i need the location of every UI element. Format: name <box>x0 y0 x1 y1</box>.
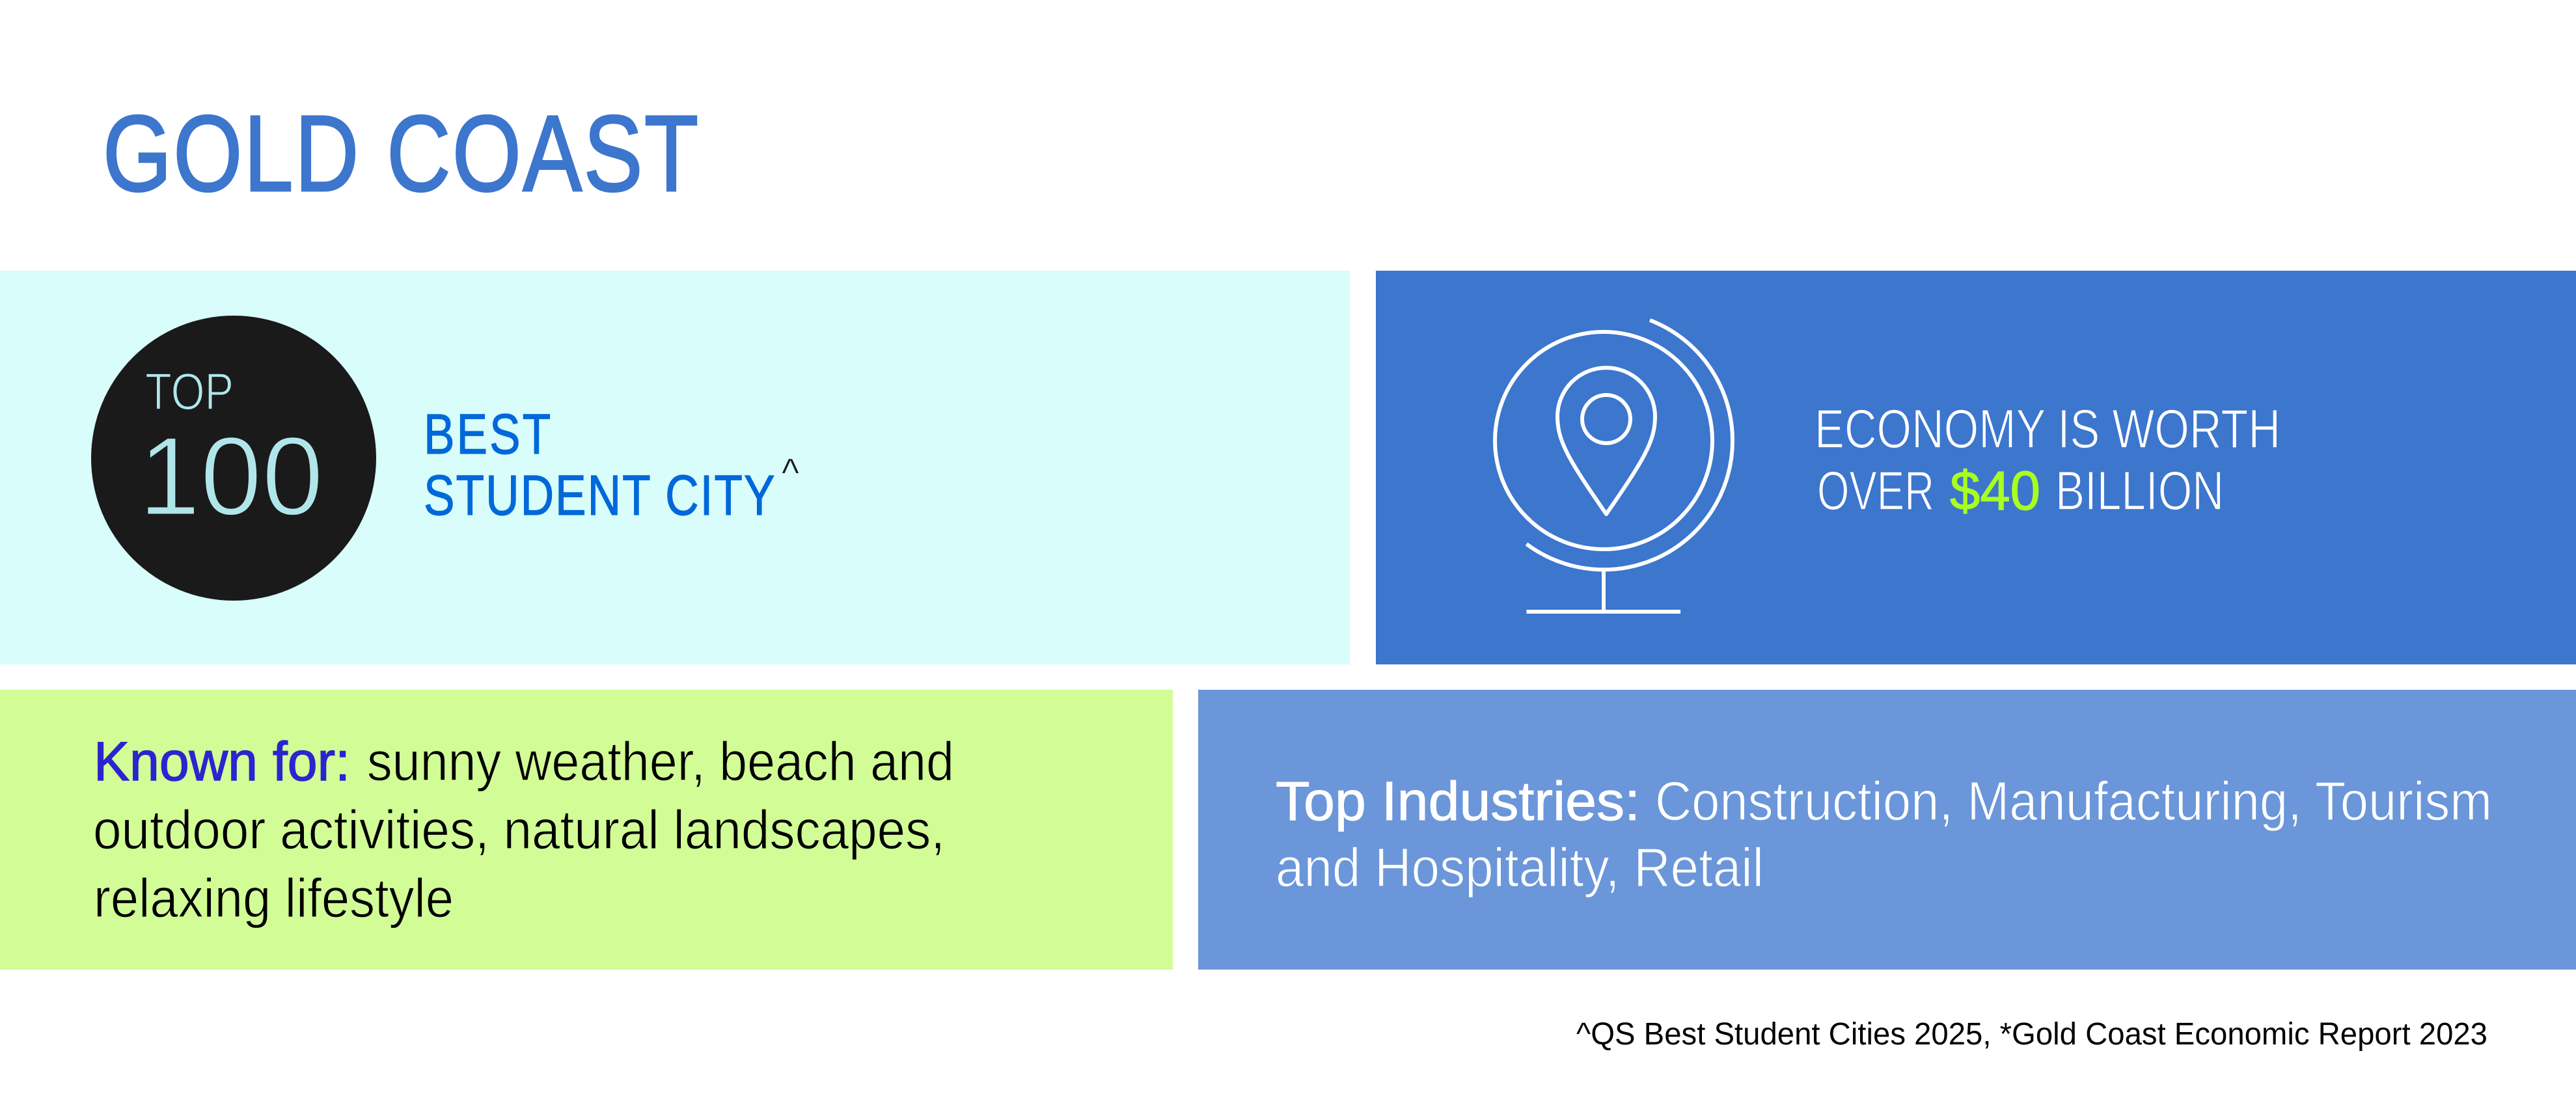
text: known for: outdoor activities, natural landscapes, <box>93 799 945 860</box>
panel: best student city <box>0 271 1350 664</box>
stat: economy value: OVER <box>1817 460 1934 521</box>
text: top industries: Construction, Manufacturing, Tourism <box>1655 770 2492 832</box>
panel: known for <box>0 690 1173 970</box>
footnote: ^QS Best Student Cities 2025, *Gold Coast Economic Report 2023 <box>1576 1017 2487 1052</box>
title: GOLD COAST <box>103 94 698 214</box>
stat: economy value <box>1815 398 2281 521</box>
panel: economy <box>1376 271 2576 664</box>
text: top industries: and Hospitality, Retail <box>1276 837 1764 898</box>
text: top industries: Top Industries: <box>1276 770 1640 832</box>
heading: best student city: BEST <box>424 402 551 466</box>
badge: top 100: 100 <box>139 414 323 539</box>
heading: best student city <box>424 402 799 527</box>
stat: economy value: BILLION <box>2055 460 2224 521</box>
text: top industries <box>1276 770 2492 898</box>
heading: best student city: STUDENT CITY <box>424 463 775 527</box>
text: known for: sunny weather, beach and <box>367 731 954 792</box>
badge: top 100 <box>91 316 376 601</box>
stat: economy value: ECONOMY IS WORTH <box>1815 398 2281 459</box>
stat: economy value: $40 <box>1950 460 2040 521</box>
panel: top industries <box>1198 690 2576 970</box>
text: known for: relaxing lifestyle <box>94 867 454 929</box>
icon: globe with location pin <box>1495 320 1733 612</box>
text: known for <box>93 731 954 929</box>
text: known for: Known for: <box>94 731 350 792</box>
badge: top 100: TOP <box>145 362 234 420</box>
heading: best student city: ^ <box>782 451 799 496</box>
